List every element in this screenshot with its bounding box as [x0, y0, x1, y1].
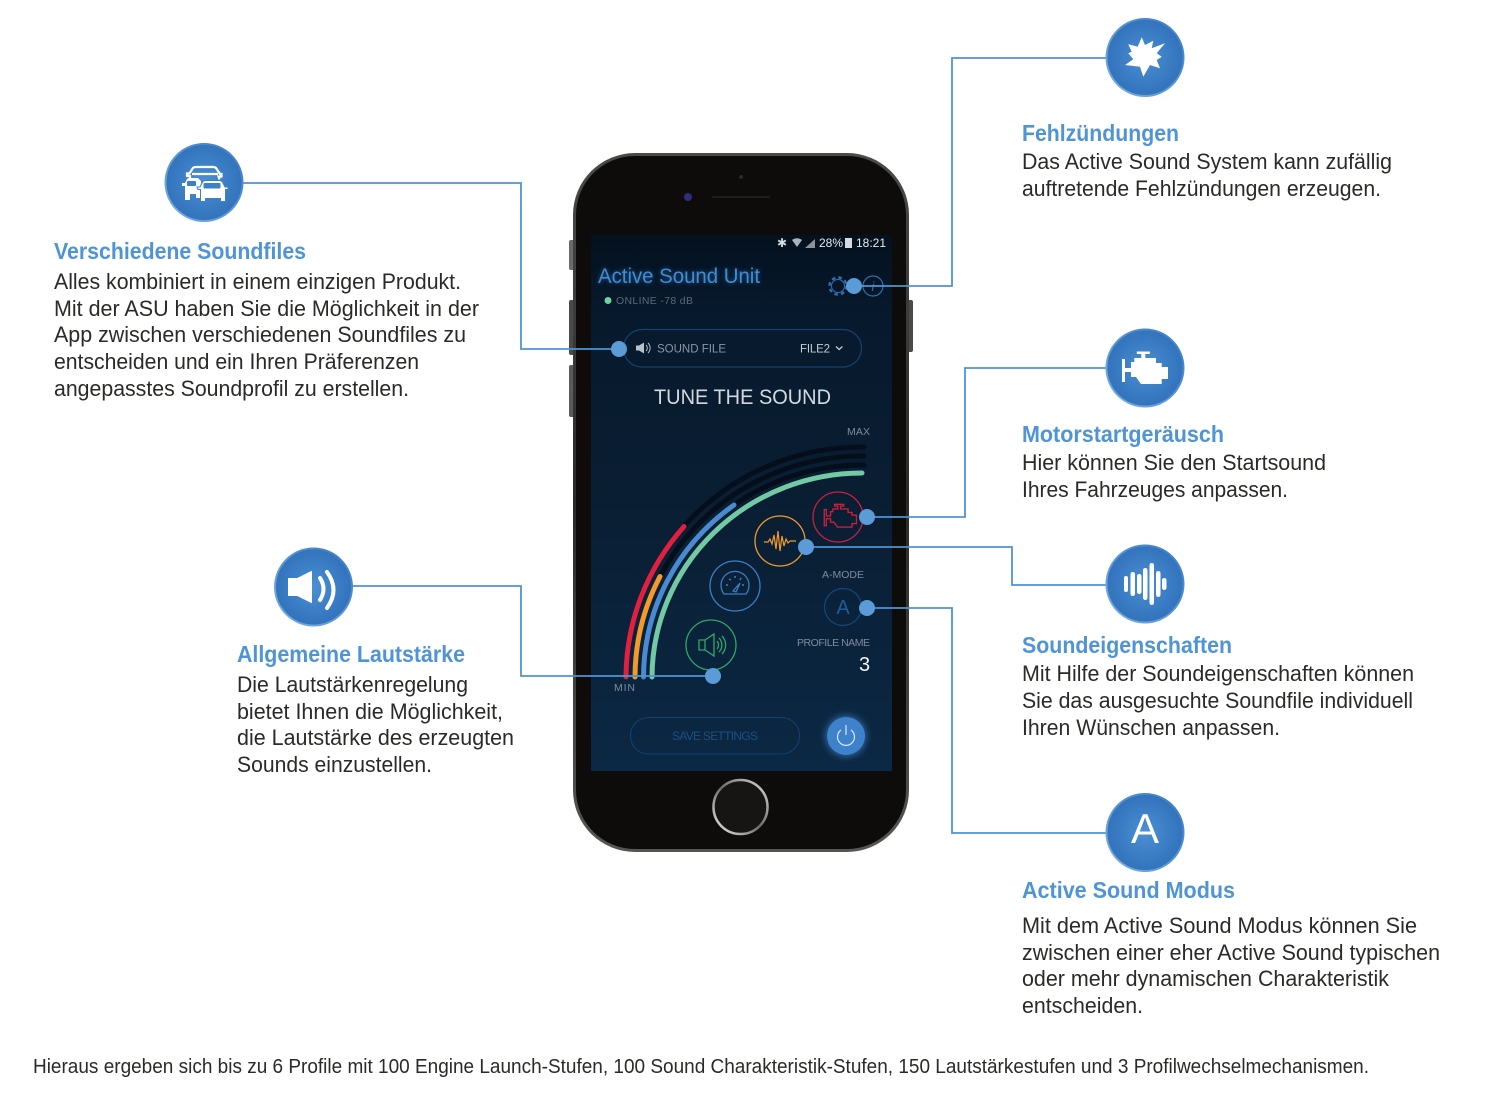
text: Motorstartgeräusch: Ihres Fahrzeuges anpassen. [1022, 477, 1288, 502]
save settings button: SAVE SETTINGS [672, 729, 758, 743]
status bar: 28% [819, 236, 843, 250]
icon: sensor [739, 175, 743, 179]
text: Verschiedene Soundfiles: angepasstes Soundprofil zu erstellen. [54, 376, 409, 401]
icon: letter A: A [1131, 805, 1159, 852]
icon: home button [714, 780, 768, 834]
sound file selector: FILE2 [800, 344, 830, 356]
screen heading: TUNE THE SOUND [654, 385, 831, 409]
text: Active Sound Modus: entscheiden. [1022, 993, 1143, 1018]
icon: letter A [1106, 794, 1184, 871]
label: a-mode: A-MODE [822, 569, 864, 581]
text: Verschiedene Soundfiles: entscheiden und ein Ihren Präferenzen [54, 349, 419, 374]
connector lines [243, 58, 1107, 833]
power button [825, 715, 867, 757]
text: Allgemeine Lautstärke: bietet Ihnen die Möglichkeit, [237, 699, 503, 724]
text: Active Sound Modus: oder mehr dynamischen Charakteristik [1022, 966, 1390, 991]
text: Motorstartgeräusch: Hier können Sie den Startsound [1022, 450, 1326, 475]
label: max: MAX [847, 426, 870, 438]
icon: gauge [710, 561, 760, 611]
icon: engine start [813, 492, 863, 542]
text: Soundeigenschaften: Mit Hilfe der Soundeigenschaften können [1022, 661, 1414, 686]
text: Fehlzündungen: Fehlzündungen [1022, 120, 1179, 146]
icon: misfire burst [1106, 19, 1184, 96]
text: Active Sound Modus: Mit dem Active Sound Modus können Sie [1022, 913, 1417, 938]
text: Fehlzündungen: auftretende Fehlzündungen erzeugen. [1022, 176, 1381, 201]
text: Allgemeine Lautstärke [237, 641, 514, 777]
status bar [777, 236, 886, 250]
app title: Active Sound Unit [598, 265, 760, 288]
text: Allgemeine Lautstärke: die Lautstärke des erzeugten [237, 725, 514, 750]
text: Allgemeine Lautstärke: Sounds einzustellen. [237, 752, 432, 777]
icon: engine [1106, 330, 1184, 406]
online status: ONLINE -78 dB [616, 295, 693, 307]
text: Motorstartgeräusch: Motorstartgeräusch [1022, 421, 1224, 447]
icon: a-mode button [824, 588, 862, 626]
text: Verschiedene Soundfiles: Mit der ASU haben Sie die Möglichkeit in der [54, 296, 479, 321]
arc gauge [626, 447, 864, 677]
text: Active Sound Modus: zwischen einer eher Active Sound typischen [1022, 940, 1440, 965]
status bar: 18:21 [856, 236, 886, 250]
app title: Active Sound Unit [598, 265, 760, 288]
icon: speaker [275, 548, 352, 626]
save settings button [630, 718, 800, 754]
text: Verschiedene Soundfiles: Alles kombiniert in einem einzigen Produkt. [54, 269, 461, 294]
icon: info [863, 276, 883, 296]
footer note: Hieraus ergeben sich bis zu 6 Profile mit 100 Engine Launch-Stufen, 100 Sound Charakteristik-Stufen, 150 Lautstärkestufen und 3 Profilwechselmechanismen. [33, 1056, 1369, 1078]
icon: info: i [872, 279, 876, 294]
icon: volume [686, 620, 736, 670]
text: Soundeigenschaften: Ihren Wünschen anpassen. [1022, 715, 1280, 740]
icon: earpiece [712, 196, 770, 198]
icon: front camera [684, 193, 692, 201]
status bar: ✱ [777, 236, 787, 250]
icon: settings gear [830, 278, 846, 294]
icon: cars [166, 144, 242, 221]
app screen [591, 235, 892, 771]
label: profile name: PROFILE NAME [797, 637, 870, 649]
icon: sound wave [755, 516, 805, 566]
text: Active Sound Modus [1022, 877, 1440, 1018]
text: Allgemeine Lautstärke: Allgemeine Lautstärke [237, 641, 465, 667]
connector dots [611, 278, 875, 684]
phone body [569, 153, 913, 852]
text: Fehlzündungen [1022, 120, 1392, 201]
text: Soundeigenschaften [1022, 632, 1414, 740]
label: min: MIN [614, 682, 635, 694]
text: Active Sound Modus: Active Sound Modus [1022, 877, 1235, 903]
text: Motorstartgeräusch [1022, 421, 1326, 502]
text: Allgemeine Lautstärke: Die Lautstärkenregelung [237, 672, 468, 697]
text: Soundeigenschaften: Sie das ausgesuchte Soundfile individuell [1022, 688, 1413, 713]
text: Verschiedene Soundfiles [54, 238, 479, 401]
text: Verschiedene Soundfiles: Verschiedene Soundfiles [54, 238, 306, 264]
text: Fehlzündungen: Das Active Sound System kann zufällig [1022, 149, 1392, 174]
icon: sound bars [1106, 546, 1184, 622]
text: Verschiedene Soundfiles: App zwischen verschiedenen Soundfiles zu [54, 322, 466, 347]
icon: a-mode button: A [836, 597, 850, 619]
text: Soundeigenschaften: Soundeigenschaften [1022, 632, 1232, 658]
sound file selector [624, 330, 862, 367]
sound file selector: SOUND FILE [657, 344, 726, 356]
profile number: 3 [859, 654, 870, 676]
